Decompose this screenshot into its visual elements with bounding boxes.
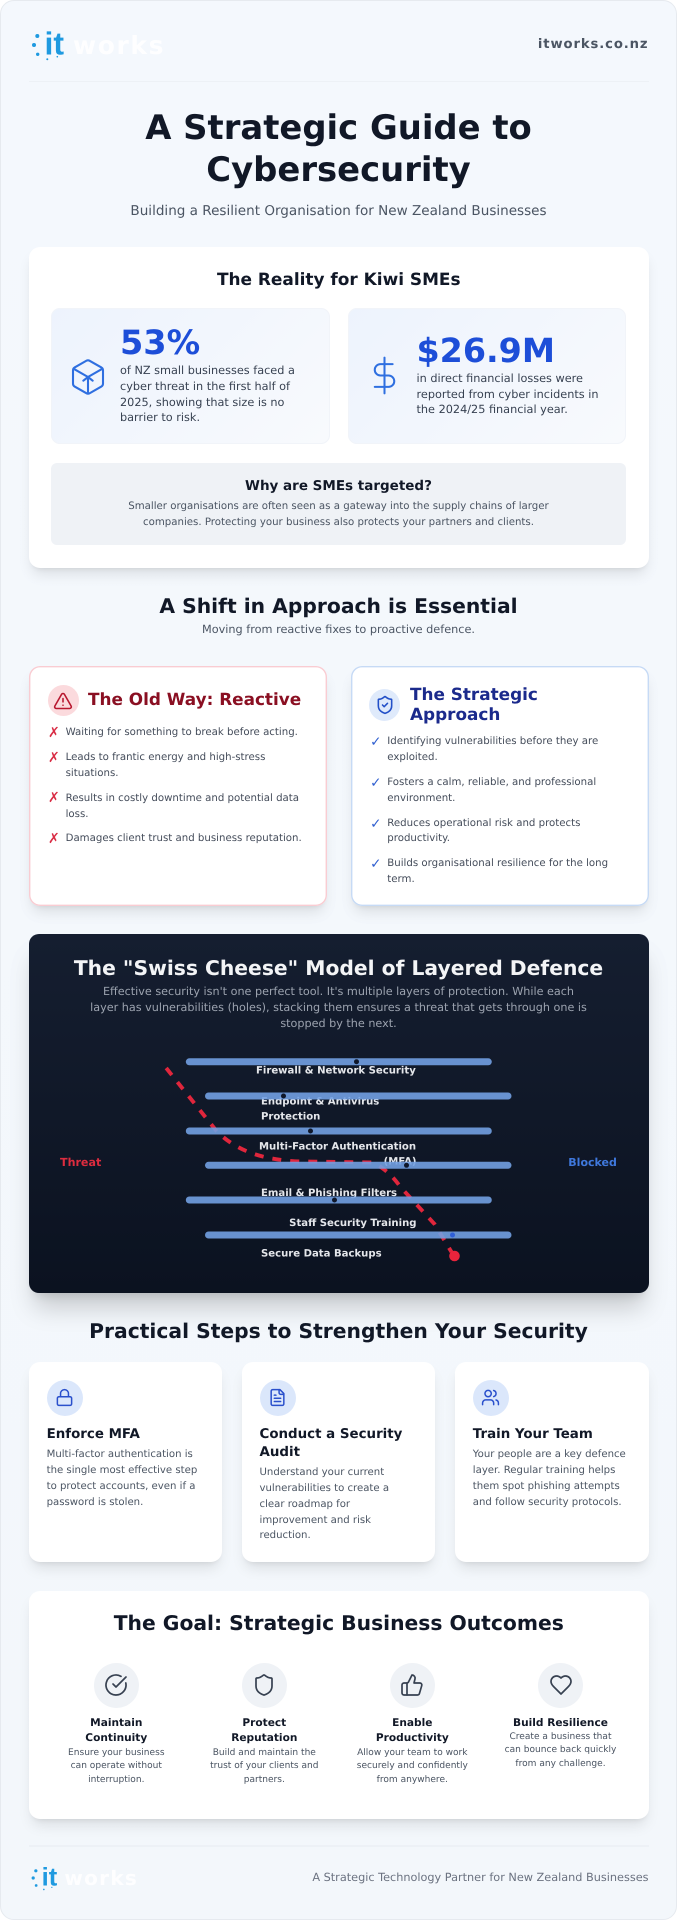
card: enforce MFA: [29, 1362, 222, 1562]
icon: warning: [48, 685, 79, 716]
card text: and follow security protocols.: [473, 1497, 622, 1508]
outcome text: Ensure your business: [68, 1748, 165, 1758]
card text: password is stolen.: [47, 1497, 143, 1508]
stat card: 53%: [51, 308, 330, 444]
list: old way: loss.: [66, 809, 89, 820]
outcome: continuity: [68, 1663, 165, 1785]
callout text: companies. Protecting your business also protects your partners and clients.: [143, 517, 534, 528]
outcome title: Productivity: [376, 1732, 449, 1744]
panel description: layer has vulnerabilities (holes), stacking them ensures a threat that gets through one is: [90, 1001, 587, 1014]
outcome: productivity: [357, 1663, 468, 1785]
header url: itworks.co.nz: [538, 37, 648, 52]
panel: strategic approach: [351, 666, 649, 906]
stat text: 2025, showing that size is no: [120, 396, 284, 409]
layer labels: Protection: [260, 1112, 320, 1123]
layer labels: Firewall & Network Security: [256, 1066, 416, 1077]
list: strategic: term.: [387, 874, 415, 885]
outcome text: [210, 1748, 318, 1785]
list: strategic: Fosters a calm, reliable, and professional: [387, 777, 596, 788]
header logo: [32, 25, 165, 61]
card text: to protect accounts, even if a: [47, 1481, 195, 1492]
list: old way: Results in costly downtime and potential data: [66, 793, 299, 804]
icon: shield check: [369, 689, 400, 721]
panel: swiss cheese model: [28, 934, 648, 1293]
list: strategic: ✓: [370, 734, 381, 750]
footer logo: [32, 1862, 138, 1891]
footer logo: it: [42, 1862, 58, 1891]
list: strategic: ✓: [370, 856, 381, 872]
callout heading: Why are SMEs targeted?: [245, 478, 432, 494]
outcome text: securely and confidently: [357, 1761, 468, 1771]
card title: Enforce MFA: [47, 1427, 140, 1442]
diagram: layered defence: [60, 1058, 616, 1262]
outcome title: Protect: [242, 1717, 286, 1729]
panel: old way: [29, 666, 327, 906]
card text: [260, 1467, 389, 1541]
card text: reduction.: [260, 1530, 311, 1541]
card text: Multi-factor authentication is: [47, 1449, 193, 1460]
card text: vulnerabilities to create a: [260, 1483, 389, 1494]
list: strategic: Identifying vulnerabilities before they are: [387, 736, 598, 747]
outcome: reputation: [210, 1663, 318, 1785]
list: old way: situations.: [66, 768, 118, 779]
panel heading: The "Swiss Cheese" Model of Layered Defence: [74, 956, 603, 980]
card title: The Old Way: Reactive: [88, 689, 301, 709]
list: strategic: productivity.: [387, 833, 450, 844]
outcome title: Enable: [392, 1717, 432, 1729]
stat text: [120, 364, 295, 424]
card text: them spot phishing attempts: [473, 1481, 620, 1492]
list: old way: Waiting for something to break before acting.: [66, 727, 298, 738]
card: security audit: [242, 1362, 435, 1562]
card title: [260, 1427, 402, 1460]
panel description: Effective security isn't one perfect tool. It's multiple layers of protection. While each: [103, 985, 574, 998]
list: strategic: exploited.: [387, 752, 438, 763]
blocked label: Blocked: [568, 1156, 616, 1169]
list: strategic: ✓: [370, 775, 381, 791]
stat text: [416, 372, 598, 416]
card text: clear roadmap for: [260, 1499, 350, 1510]
stat text: barrier to risk.: [120, 411, 200, 424]
layer labels: Endpoint & Antivirus: [260, 1096, 379, 1107]
layer labels: Multi-Factor Authentication: [258, 1142, 416, 1153]
card text: layer. Regular training helps: [473, 1465, 615, 1476]
card text: [472, 1449, 626, 1508]
card title: Train Your Team: [473, 1427, 593, 1442]
card: train your team: [455, 1362, 648, 1562]
icon: thumbs up: [390, 1663, 435, 1708]
panel description: [90, 985, 587, 1030]
section heading: shift: A Shift in Approach is Essential: [159, 594, 518, 618]
icon: shield: [242, 1663, 287, 1708]
card text: Understand your current: [260, 1467, 384, 1478]
layer labels: (MFA): [383, 1157, 416, 1168]
layer labels: Staff Security Training: [289, 1218, 416, 1229]
outcome: resilience: [505, 1663, 616, 1769]
outcome text: [68, 1748, 165, 1785]
outcome text: [357, 1748, 468, 1785]
list: strategic: Reduces operational risk and protects: [387, 818, 580, 829]
callout text: [128, 501, 549, 528]
card text: the single most effective step: [47, 1465, 197, 1476]
section heading: practical steps: Practical Steps to Strengthen Your Security: [89, 1319, 588, 1343]
title: [145, 108, 532, 189]
list: old way: ✗: [48, 750, 60, 766]
stat text: reported from cyber incidents in: [416, 388, 598, 401]
card title: [410, 684, 538, 724]
list: old way: ✗: [48, 725, 60, 741]
outcome text: from anywhere.: [377, 1775, 448, 1785]
icon: lock: [47, 1380, 83, 1416]
list: strategic: ✓: [370, 816, 381, 832]
outcome text: Build and maintain the: [213, 1748, 316, 1758]
outcome title: [376, 1717, 449, 1744]
outcome text: Create a business that: [509, 1732, 612, 1742]
defence layers: [185, 1058, 511, 1238]
icon: check circle: [94, 1663, 139, 1708]
card title: Audit: [260, 1445, 300, 1460]
stat text: the 2024/25 financial year.: [416, 403, 568, 416]
outcome text: can bounce back quickly: [505, 1745, 616, 1755]
outcome text: trust of your clients and: [210, 1761, 318, 1771]
card text: improvement and risk: [260, 1515, 371, 1526]
stat value: 53%: [120, 323, 200, 362]
title: A Strategic Guide to: [145, 108, 532, 147]
panel: business outcomes: [29, 1591, 648, 1819]
callout text: Smaller organisations are often seen as a gateway into the supply chains of larger: [128, 501, 549, 512]
card title: Approach: [410, 704, 500, 724]
heading: The Reality for Kiwi SMEs: [217, 269, 461, 289]
list: strategic: Builds organisational resilience for the long: [387, 858, 608, 869]
outcome title: Continuity: [85, 1732, 147, 1744]
outcome title: Reputation: [231, 1732, 297, 1744]
heading: The Goal: Strategic Business Outcomes: [114, 1611, 564, 1635]
list: strategic: [370, 734, 608, 885]
stat text: in direct financial losses were: [416, 372, 583, 385]
stat text: of NZ small businesses faced a: [120, 364, 295, 377]
list: old way: ✗: [48, 831, 60, 847]
outcome text: [505, 1732, 616, 1769]
list: old way: Damages client trust and business reputation.: [66, 833, 302, 844]
icon: document: [260, 1380, 296, 1416]
icon: dollar: [374, 356, 396, 394]
card title: The Strategic: [410, 684, 538, 704]
outcome title: [231, 1717, 297, 1744]
stat value: $26.9M: [416, 331, 555, 370]
threat label: Threat: [60, 1156, 101, 1169]
section subheading: Moving from reactive fixes to proactive defence.: [202, 623, 475, 636]
list: old way: Leads to frantic energy and high-stress: [66, 752, 265, 763]
stat card: $26.9M: [348, 308, 626, 444]
threat path: [166, 1068, 459, 1261]
panel: reality for Kiwi SMEs: [29, 247, 648, 568]
icon: heart: [538, 1663, 583, 1708]
subtitle: Building a Resilient Organisation for New Zealand Businesses: [130, 202, 547, 218]
outcome text: interruption.: [88, 1775, 144, 1785]
outcome text: from any challenge.: [515, 1759, 606, 1769]
list: old way: ✗: [48, 790, 60, 806]
footer logo: works: [64, 1867, 138, 1890]
panel description: stopped by the next.: [280, 1017, 397, 1030]
card text: [46, 1449, 197, 1508]
icon: users: [473, 1380, 509, 1416]
list: strategic: environment.: [387, 793, 455, 804]
title: Cybersecurity: [206, 150, 471, 189]
outcome title: [85, 1717, 147, 1744]
layer labels: [256, 1066, 416, 1259]
outcome text: can operate without: [71, 1761, 162, 1771]
outcome title: Maintain: [90, 1717, 142, 1729]
outcome text: partners.: [244, 1775, 285, 1785]
callout: why SMEs targeted: [51, 463, 626, 545]
list: old way: [48, 725, 302, 847]
layer labels: Secure Data Backups: [260, 1248, 381, 1259]
header logo: works: [73, 31, 165, 60]
icon: box: [72, 359, 104, 395]
outcome text: Allow your team to work: [357, 1748, 468, 1758]
footer text: A Strategic Technology Partner for New Zealand Businesses: [312, 1871, 648, 1884]
layer labels: Email & Phishing Filters: [260, 1188, 397, 1199]
outcome title: Build Resilience: [513, 1717, 608, 1729]
stat text: cyber threat in the first half of: [120, 380, 290, 393]
card text: Your people are a key defence: [473, 1449, 626, 1460]
card title: Conduct a Security: [260, 1427, 402, 1442]
header logo: it: [44, 25, 64, 61]
layer holes: [280, 1059, 454, 1238]
